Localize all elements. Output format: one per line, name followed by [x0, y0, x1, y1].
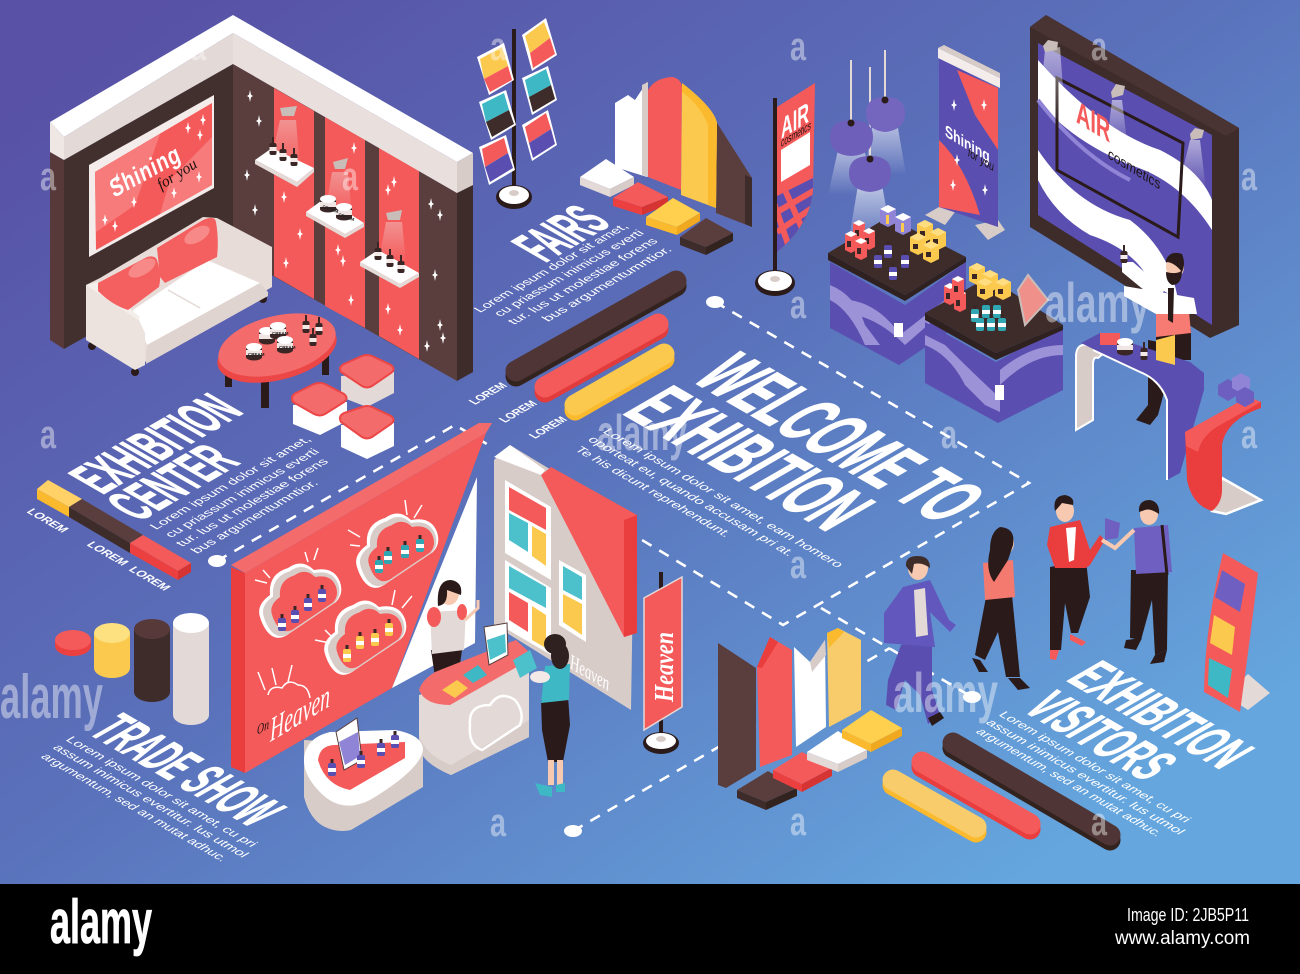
watermarks: alamy: [1045, 271, 1150, 334]
text block: welcome: Lorem ipsum dolor sit amet, eam homero: [599, 426, 847, 570]
footer image id: Image ID: 2JB5P11: [1127, 905, 1249, 925]
reception counter: [419, 623, 529, 775]
text block: exhibition center: tur. lus ut molestiae forens: [172, 456, 332, 549]
text block: exhibition visitors: [972, 709, 1195, 839]
text block: exhibition center: [146, 434, 332, 556]
service counter: [1076, 333, 1204, 480]
watermarks: a: [790, 800, 807, 844]
watermarks: a: [40, 413, 57, 457]
text block: fairs: tur. lus ut molestiae forens: [504, 236, 661, 327]
visitor: man with bag: [1102, 500, 1172, 664]
red wall with clouds: [231, 423, 492, 773]
large display wall: AIR cosmetics: [1030, 15, 1239, 338]
watermarks: a: [1241, 413, 1258, 457]
labels: exhibition center stack: LOREM: [83, 539, 132, 568]
salesman: [1120, 245, 1197, 425]
heading: exhibition center: [55, 385, 256, 529]
flag: AIR cosmetics: cosmetics: [781, 119, 811, 151]
labels: fairs pills: LOREM: [525, 414, 571, 441]
coffee table: [211, 302, 343, 408]
text block: fairs: [470, 221, 675, 327]
coffee table: CREAM: [248, 352, 265, 357]
watermarks: a: [40, 155, 57, 199]
text block: exhibition center: bus argumentumntior.: [187, 478, 322, 556]
text block: trade show: argumentum, sed an mutat adhuc.: [37, 751, 231, 864]
flag: On Heaven: Heaven: [649, 632, 679, 703]
text block: exhibition center: cu priassum inimicus everti: [161, 446, 323, 540]
labels: fairs pills: LOREM: [495, 398, 541, 425]
panel: fairs charts and brochure stand: [477, 18, 752, 410]
arched bars: [615, 77, 752, 227]
text block: fairs: Lorem ipsum dolor sit amet,: [470, 221, 632, 315]
wall picture: Shining for you: Shining: [106, 140, 184, 204]
watermarks: a: [1091, 800, 1108, 844]
display table 2: [925, 263, 1063, 423]
poster wall: Heaven: [569, 650, 609, 697]
woman at counter: [427, 580, 478, 684]
text block: welcome: [571, 426, 847, 570]
legend blocks: [580, 159, 733, 255]
text block: fairs: bus argumentumntior.: [538, 244, 675, 324]
stacked bar: exhibition center: [37, 480, 191, 580]
heading: welcome to exhibition: WELCOME TO: [674, 342, 1006, 534]
table 2 products: [944, 263, 1048, 331]
labels: exhibition center stack: [23, 506, 174, 593]
text block: welcome: oporteat eu, quando accusam pri at.: [584, 434, 798, 558]
heading: welcome to exhibition: [605, 342, 1006, 542]
coffee table: CREAM: [279, 345, 296, 350]
watermarks: a: [790, 25, 807, 69]
watermarks: a: [490, 25, 507, 69]
stools: [292, 355, 394, 459]
dashed connector lines: [208, 296, 1029, 837]
large display wall: AIR cosmetics: cosmetics: [1108, 145, 1160, 194]
text block: exhibition visitors: assum inimicus evertitur. lus utmol: [982, 717, 1189, 837]
wall sparkles: [244, 90, 446, 352]
watermarks: alamy: [893, 661, 998, 724]
watermarks: a: [490, 801, 507, 845]
watermarks: a: [1091, 25, 1108, 69]
wall logo: On Heaven: On: [257, 716, 269, 738]
panel: exhibition center booth: [50, 15, 473, 459]
bar chart: arrows: [718, 628, 861, 788]
roll-up banner: Shining for you: [925, 45, 1005, 240]
panel: exhibition visitors: [718, 495, 1270, 840]
text block: exhibition center: Lorem ipsum dolor sit amet,: [146, 434, 314, 532]
roll-up banner: Shining for you: Shining: [945, 121, 990, 167]
labels: exhibition center stack: LOREM: [125, 564, 174, 593]
footer url: www.alamy.com: [1114, 928, 1250, 949]
brochure stand: [477, 18, 557, 209]
watermarks: alamy: [0, 663, 103, 732]
coffee table: CREAM: [272, 331, 289, 336]
text block: trade show: assum inimicus evertitur. lus utmol: [49, 742, 252, 860]
brochure display stand: [1204, 553, 1270, 712]
heading: exhibition center: EXHIBITION: [55, 385, 256, 502]
wall logo: On Heaven: Heaven: [269, 677, 330, 751]
flag: On Heaven: [643, 572, 682, 754]
heading: fairs: FAIRS: [498, 197, 624, 270]
watermarks: a: [1241, 155, 1258, 199]
text block: exhibition visitors: argumentum, sed an mutat adhuc.: [972, 726, 1166, 839]
white wall cap: [50, 15, 473, 193]
shelves with products: [255, 106, 419, 288]
watermarks: a: [790, 283, 807, 327]
booth walls: [50, 64, 473, 381]
cylinder chart: [55, 613, 209, 725]
text block: trade show: Lorem ipsum dolor sit amet, cu pri: [62, 734, 261, 849]
labels: fairs pills: LOREM: [465, 380, 511, 407]
visitor: woman in red jacket: [1047, 495, 1105, 660]
wall logo: On Heaven: [257, 665, 330, 751]
visitor: woman in salmon top: [972, 527, 1030, 690]
sofa: [86, 217, 272, 376]
legend blocks: [737, 710, 902, 810]
panel: air cosmetics booth: [755, 15, 1261, 514]
watermarks: a: [790, 543, 807, 587]
flag: AIR cosmetics: [755, 83, 815, 296]
small display table: [304, 718, 423, 831]
table 1 products: [845, 205, 946, 280]
heading: exhibition center: CENTER: [92, 436, 252, 529]
text block: fairs: cu priassum inimicus everti: [490, 228, 647, 319]
roll-up banner: Shining for you: for you: [968, 144, 994, 175]
poster wall: [494, 445, 637, 710]
visitor: man in purple suit: [884, 556, 956, 726]
flag: AIR cosmetics: AIR: [781, 95, 809, 145]
footer bar: [0, 884, 1300, 974]
watermarks: a: [190, 25, 207, 69]
heading: welcome to exhibition: EXHIBITION: [605, 375, 894, 542]
red promo stand: [1185, 373, 1261, 514]
labels: fairs pills: [465, 380, 571, 441]
watermarks: a: [342, 155, 359, 199]
shelves with products: CREAM: [338, 212, 355, 222]
display table 1: [828, 205, 966, 365]
text block: welcome: Te his dicunt reprehendunt.: [571, 444, 735, 539]
panel: trade show booth: [231, 423, 682, 831]
labels: exhibition center stack: LOREM: [23, 506, 72, 535]
pendant lamps: [828, 50, 906, 245]
cloud shelves: [255, 500, 438, 675]
footer logo: alamy: [50, 888, 152, 957]
watermarks: alamy: [597, 405, 687, 461]
watermarks: a: [941, 413, 958, 457]
pill bars: [893, 743, 1110, 840]
wall picture: Shining for you: [89, 95, 214, 257]
heading: exhibition visitors: [1010, 653, 1268, 788]
shelves with products: CREAM: [322, 204, 339, 214]
text block: trade show: [37, 734, 261, 864]
pill bars: [516, 281, 676, 410]
wall picture: Shining for you: for you: [154, 156, 200, 193]
heading: trade show: TRADE SHOW: [76, 706, 298, 835]
customer woman: [513, 634, 570, 797]
large display wall: AIR cosmetics: AIR: [1076, 93, 1110, 150]
text block: exhibition visitors: Lorem ipsum dolor sit amet, cu pri: [995, 709, 1195, 825]
